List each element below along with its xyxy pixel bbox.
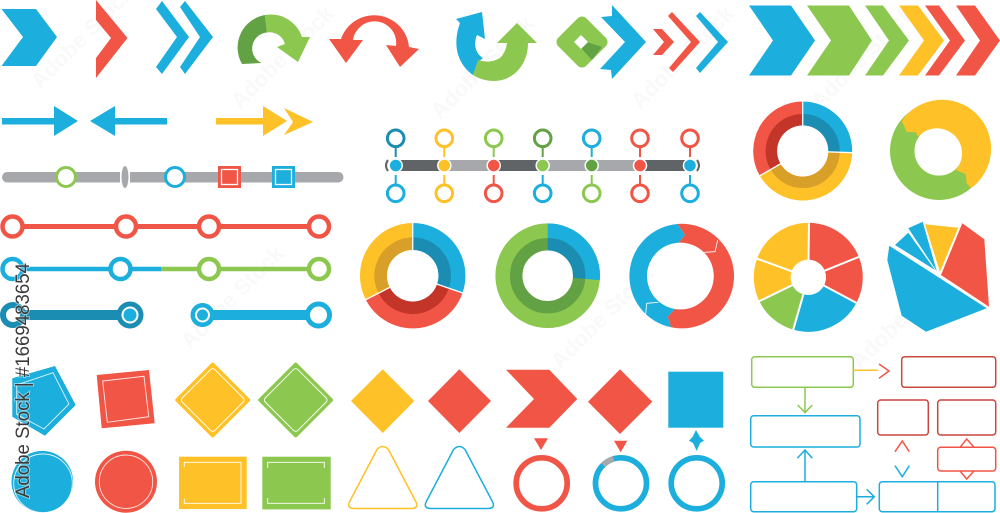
icon: large blue arrowhead <box>600 5 646 79</box>
timeline center dots <box>389 159 696 172</box>
flowchart: bright red box with chevrons <box>938 439 996 479</box>
icon: red double-headed curved arrow <box>329 15 419 67</box>
arrow: blue up <box>797 450 812 482</box>
flowchart: red small box left <box>878 400 928 435</box>
arrow: yellow double right <box>216 106 313 136</box>
icon: green rounded diamond <box>554 14 610 70</box>
arrow: red up chevron <box>895 441 909 452</box>
timeline: thick dark blue <box>3 302 144 328</box>
shape: red solid diamond 2 <box>588 369 652 434</box>
shape: yellow diamond <box>175 362 251 438</box>
icon: blue double chevron <box>156 1 213 74</box>
watermark: vertical stock credit: Adobe Stock | #1669483654 <box>12 263 34 498</box>
marker: blue diamond and ring <box>671 430 722 509</box>
marker: red triangle and ring <box>516 438 567 509</box>
text: Adobe Stock <box>806 0 919 114</box>
text: Adobe Stock <box>546 260 659 374</box>
timeline: grey bar with markers <box>2 165 344 189</box>
shape: red circle <box>95 451 157 513</box>
chart: donut yellow green zigzag <box>902 100 991 188</box>
marker: red triangle and blue ring with grey arc <box>596 441 646 509</box>
timeline bottom rings <box>387 185 698 202</box>
text: Adobe Stock <box>176 240 289 354</box>
shape: yellow rectangle <box>179 457 247 509</box>
arrow: blue right <box>857 489 874 504</box>
icon: green curved arrow <box>238 15 310 64</box>
text: Adobe Stock <box>226 0 339 114</box>
icon: red chevron <box>96 0 128 78</box>
shape: blue circle <box>12 451 73 513</box>
icon: blue chevron <box>2 9 57 66</box>
shape: blue square <box>668 372 723 428</box>
shape: blue outlined triangle <box>425 446 493 508</box>
chart: donut blue yellow red <box>751 100 854 202</box>
chart: donut yellow blue red <box>360 223 465 328</box>
icon: red and blue triple chevrons <box>653 12 728 73</box>
shape: red large chevron <box>506 370 577 428</box>
flowchart: blue bottom-left box <box>751 482 857 512</box>
timeline: red four nodes <box>2 216 329 236</box>
timeline: seven-node horizontal timeline <box>386 130 699 202</box>
arrow: green down <box>798 387 812 413</box>
shape: yellow outlined triangle <box>349 446 417 508</box>
shape: green diamond <box>258 362 334 438</box>
flowchart <box>751 357 996 512</box>
chart: ring blue red zigzag <box>629 224 734 328</box>
shape: red tilted square <box>97 370 155 428</box>
shape: red solid diamond <box>428 369 491 433</box>
chart: six-segment ring <box>757 222 859 330</box>
icon: blue and green circular arrows <box>456 12 537 81</box>
timeline: thick blue <box>190 303 330 327</box>
shape: blue pentagon <box>12 366 76 436</box>
timeline bar <box>386 160 699 171</box>
text: Adobe Stock <box>626 0 739 114</box>
timeline stems <box>396 147 690 184</box>
flowchart: blue split box <box>879 482 995 512</box>
arrow: yellow connector with red head <box>853 364 889 378</box>
shape: yellow solid diamond <box>351 369 414 433</box>
arrow: blue down chevron <box>895 466 909 477</box>
chart: donut blue green <box>509 237 586 314</box>
text: Adobe Stock <box>846 260 959 374</box>
flowchart: green box <box>752 357 853 387</box>
flowchart: top-right red box <box>902 357 996 387</box>
chart: exploded polygon pie <box>887 222 989 332</box>
flowchart: red small box right <box>938 400 996 435</box>
timeline: blue and green nodes <box>2 259 329 279</box>
arrow: blue right <box>2 106 78 136</box>
icon: large multicolor chevron sequence <box>749 6 1000 76</box>
timeline top rings <box>387 130 698 147</box>
shape: green rectangle <box>262 457 331 509</box>
arrow: blue left <box>90 106 167 136</box>
text: Adobe Stock <box>426 10 539 124</box>
flowchart: blue middle box <box>751 416 860 447</box>
